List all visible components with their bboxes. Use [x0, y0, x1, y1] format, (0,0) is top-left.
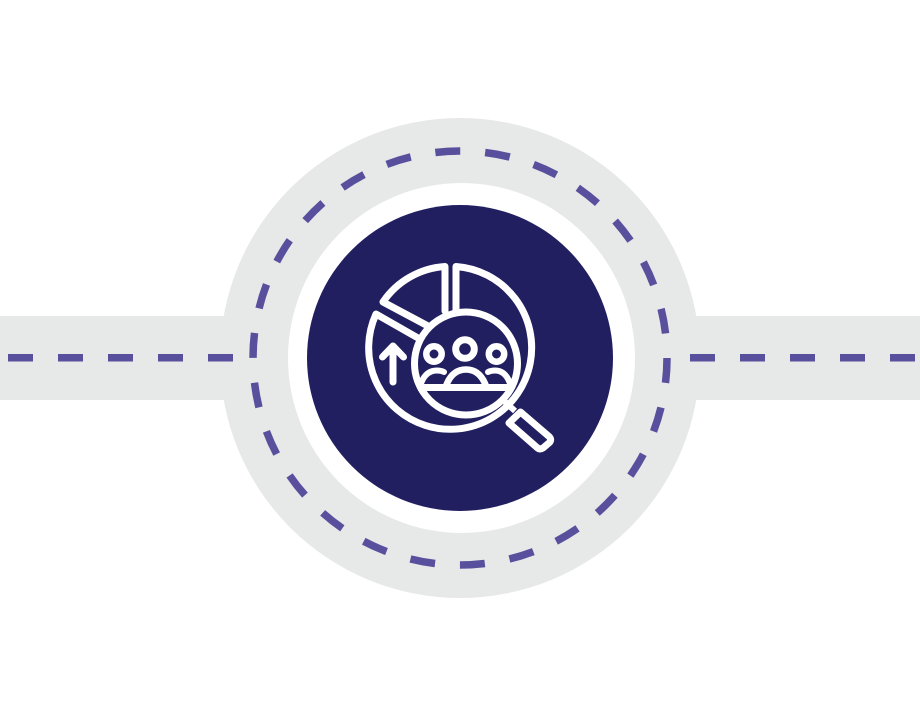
roundabout: inner white circle [288, 183, 635, 533]
icon: pie chart under magnifier with people [369, 266, 551, 449]
icon: centre person body [446, 370, 486, 386]
icon: up arrow [382, 346, 404, 382]
icon: magnifier handle [509, 412, 551, 449]
icon: handle connector [503, 400, 515, 411]
icon: left person head [426, 346, 442, 362]
icon: magnifier lens [414, 312, 518, 415]
icon: pie top-left sector [383, 266, 445, 326]
road: right dashes [690, 354, 915, 362]
navy centre disc [307, 205, 613, 511]
icon: centre person head [456, 340, 474, 358]
icon: left person body [420, 370, 444, 385]
icon: right person body [488, 370, 510, 385]
road: left band [0, 316, 240, 400]
road: left dashes [8, 354, 233, 362]
roundabout: outer grey ring [220, 118, 700, 598]
icon: right person head [489, 346, 504, 362]
icon: pie main ring and right sector [369, 266, 532, 429]
road: right band [680, 316, 920, 400]
icon: base line of people [418, 384, 513, 391]
roundabout: dashed lane marking [253, 151, 667, 565]
